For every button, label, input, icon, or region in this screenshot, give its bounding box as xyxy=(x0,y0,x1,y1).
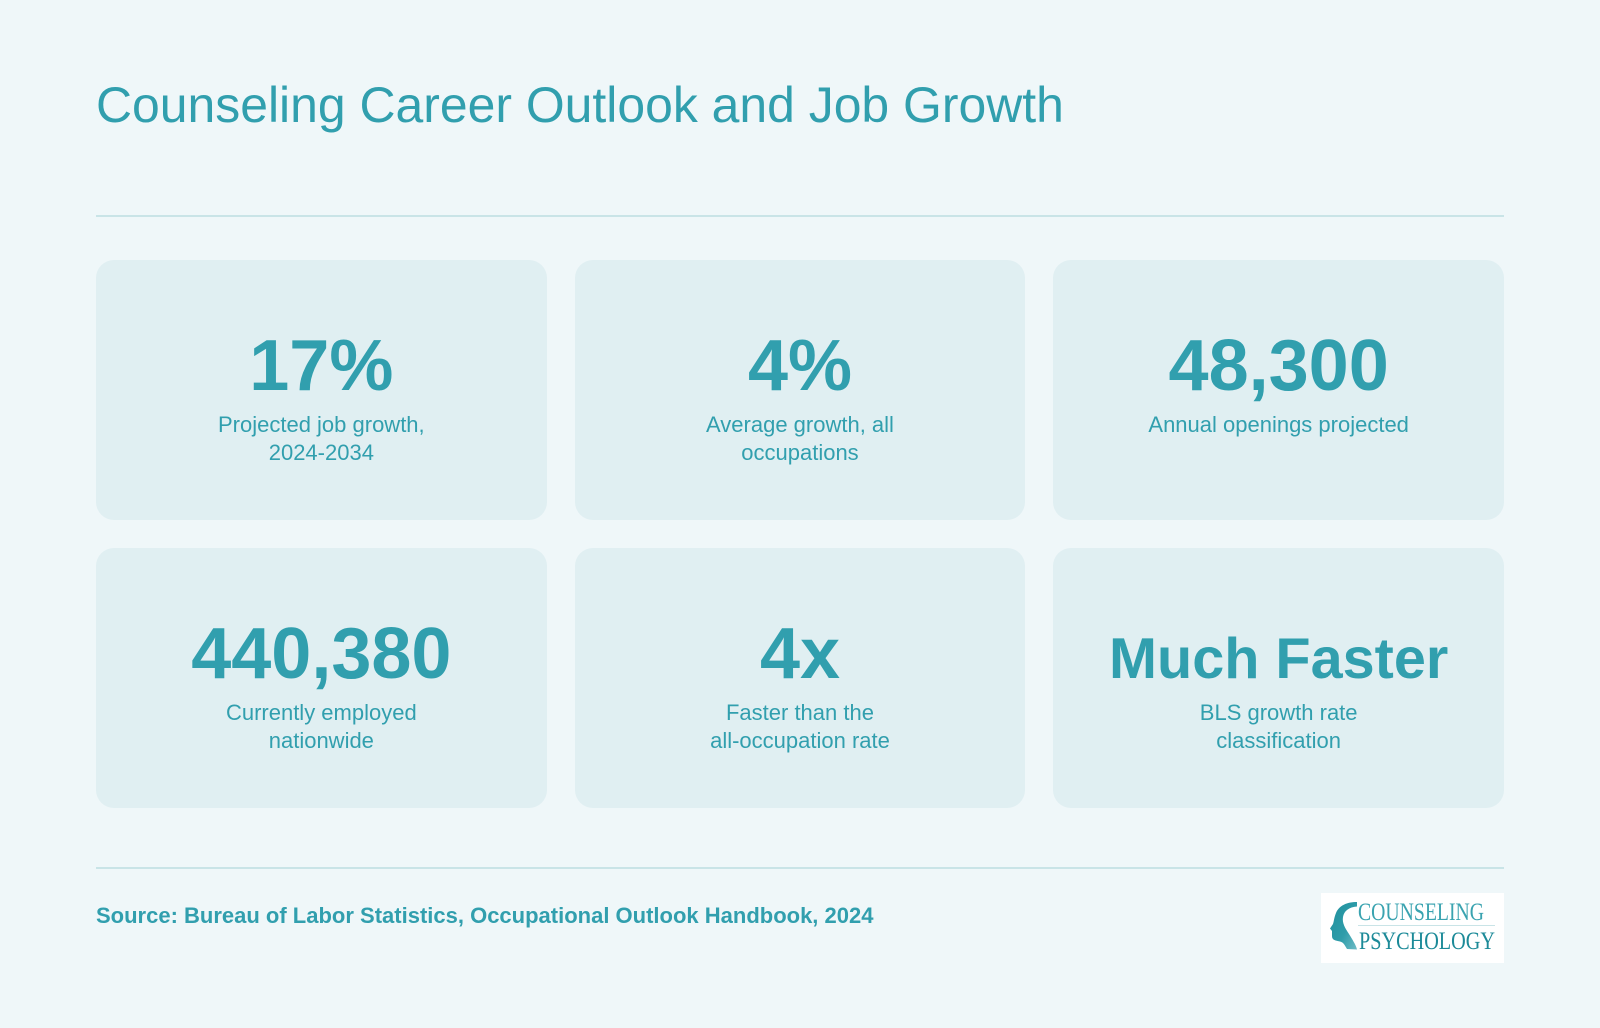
stat label: 2024-2034 xyxy=(269,440,374,465)
logo wordmark xyxy=(1358,899,1495,955)
logo: Counseling Psychology xyxy=(1321,893,1504,963)
stat card: BLS classification xyxy=(1053,548,1504,808)
stat label: all-occupation rate xyxy=(710,728,890,753)
stat card: currently employed xyxy=(96,548,547,808)
stat label: Faster than the xyxy=(726,700,874,725)
stat label xyxy=(218,412,425,465)
icon: head profile xyxy=(1330,902,1357,950)
source note: Source: Bureau of Labor Statistics, Occupational Outlook Handbook, 2024 xyxy=(96,902,873,928)
stat label: Currently employed xyxy=(226,700,417,725)
stat label xyxy=(710,700,890,753)
stat card: projected job growth xyxy=(96,260,547,520)
stat label xyxy=(1200,700,1358,753)
stat card: faster than average xyxy=(575,548,1025,808)
stat value: 4x xyxy=(760,614,840,694)
stat label: nationwide xyxy=(269,728,374,753)
stat label: Annual openings projected xyxy=(1148,412,1409,437)
stat label xyxy=(226,700,417,753)
stat label: Projected job growth, xyxy=(218,412,425,437)
stat value: 440,380 xyxy=(191,614,451,694)
stat label: Average growth, all xyxy=(706,412,894,437)
stat label xyxy=(706,412,894,465)
stat label: occupations xyxy=(741,440,859,465)
stat value: 48,300 xyxy=(1169,326,1389,406)
stat value: 17% xyxy=(249,326,393,406)
stat card: average growth xyxy=(575,260,1025,520)
stat value: Much Faster xyxy=(1109,627,1448,691)
stat card: annual openings xyxy=(1053,260,1504,520)
title: Counseling Career Outlook and Job Growth xyxy=(96,77,1064,133)
stat label: classification xyxy=(1216,728,1341,753)
stat value: 4% xyxy=(748,326,852,406)
stat label: BLS growth rate xyxy=(1200,700,1358,725)
